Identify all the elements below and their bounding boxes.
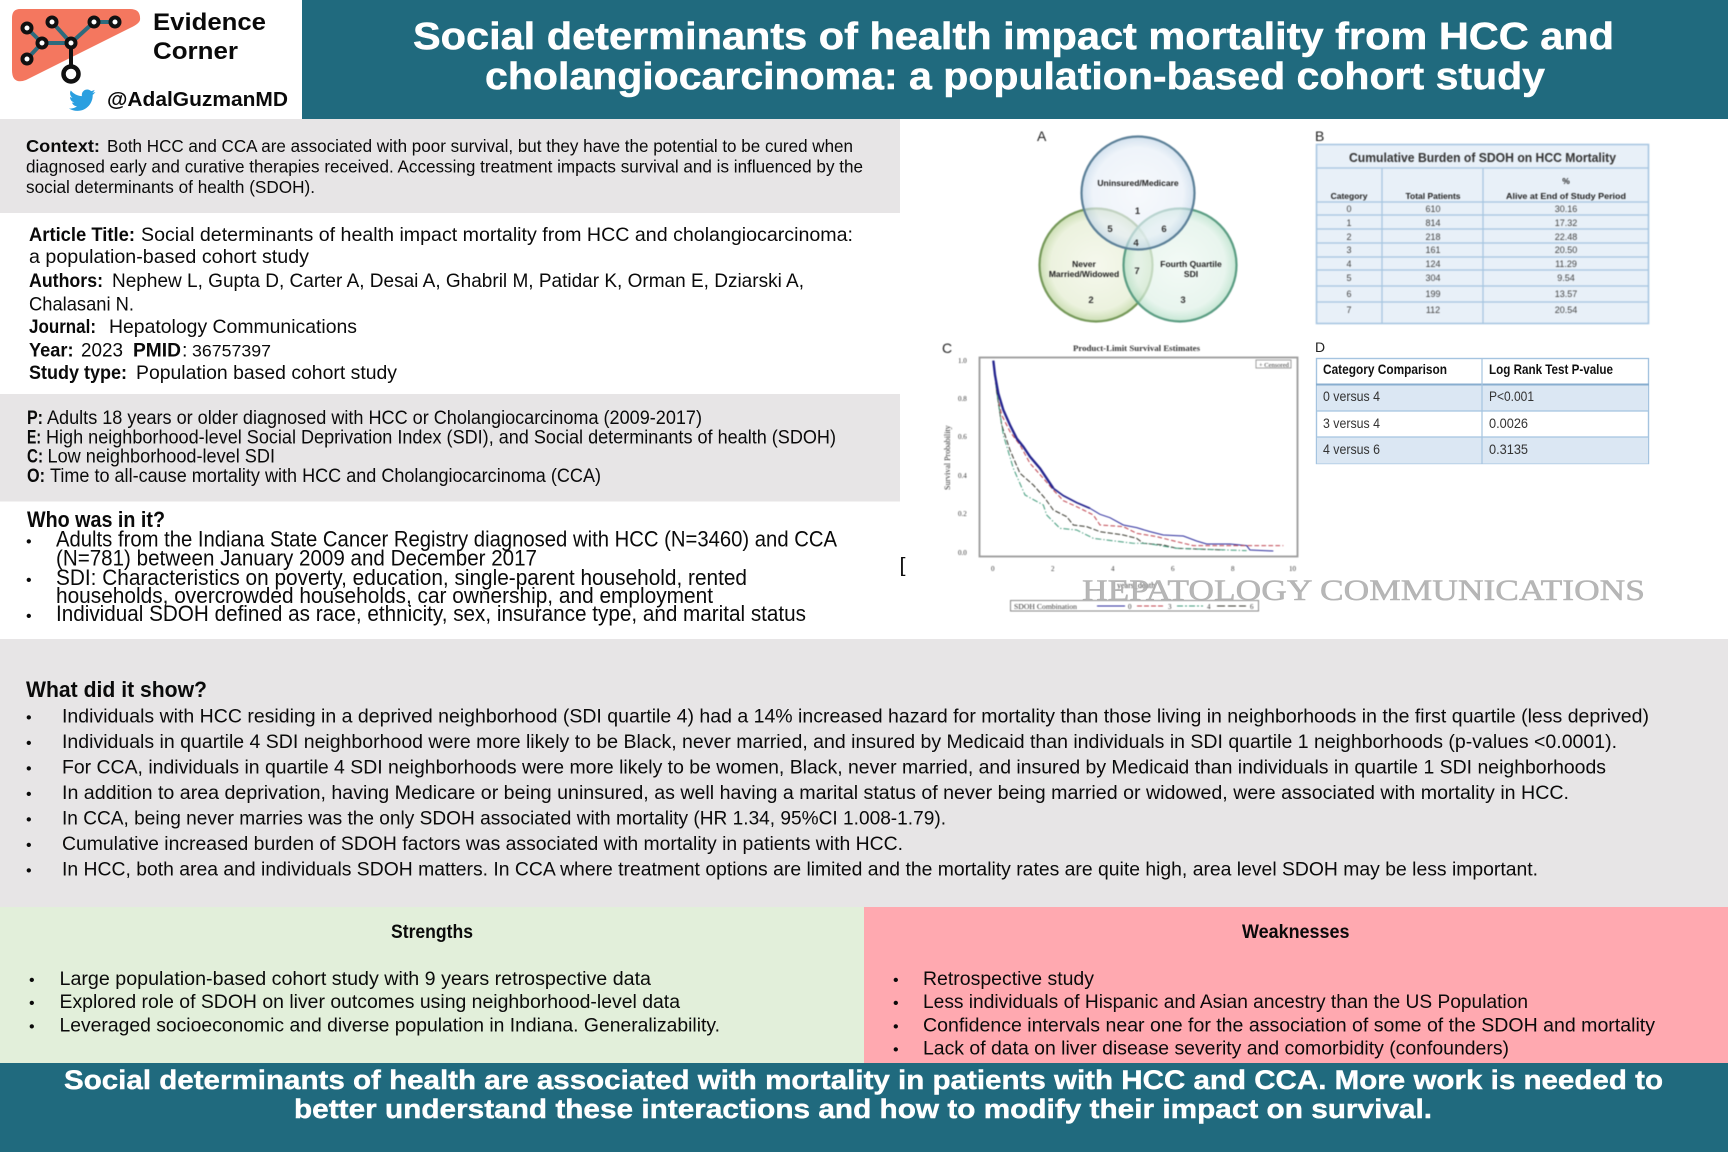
heading: What did it show? xyxy=(26,677,207,702)
logo: Evidence Corner xyxy=(12,9,288,111)
panel: article details: Study type: xyxy=(29,362,127,384)
censored key xyxy=(1256,360,1291,369)
icon: liver with network xyxy=(12,9,140,82)
findings list: For CCA, individuals in quartile 4 SDI neighborhoods were more likely to be women, Black, never married, and insured by Medicaid than individuals in quartile 1 SDI neighborhoods xyxy=(62,758,1606,778)
strengths list: Explored role of SDOH on liver outcomes using neighborhood-level data xyxy=(60,992,680,1013)
panel: article details: Chalasani N. xyxy=(29,294,134,316)
twitter handle: @AdalGuzmanMD xyxy=(107,88,288,111)
panel: article details xyxy=(29,224,853,384)
bullet list: • xyxy=(26,572,32,589)
figure B: cumulative burden table: 4 xyxy=(1346,259,1352,269)
footer: conclusion: Social determinants of health are associated with mortality in patients with HCC and CCA. More work is needed to xyxy=(64,1065,1663,1095)
title xyxy=(413,16,1614,98)
figure B: cumulative burden table: 11.29 xyxy=(1555,259,1577,269)
stray bracket: [ xyxy=(900,555,906,577)
figure B: cumulative burden table: 30.16 xyxy=(1555,204,1577,214)
weaknesses list: • xyxy=(893,972,899,989)
figure C: survival curves: Product-Limit Survival Estimates xyxy=(1073,343,1201,353)
panel: article details: 2023 xyxy=(81,340,123,362)
panel: what did it show xyxy=(0,639,1728,907)
panel: weaknesses xyxy=(864,907,1728,1063)
findings list: Cumulative increased burden of SDOH factors was associated with mortality in patients with HCC. xyxy=(62,834,903,855)
panel: article details: Authors: xyxy=(29,270,103,292)
figure B: cumulative burden table: 7 xyxy=(1346,305,1352,315)
figure B: cumulative burden table: 13.57 xyxy=(1555,289,1577,299)
legend: 4 xyxy=(1207,603,1211,611)
figure B: cumulative burden table: 6 xyxy=(1346,289,1352,299)
bullet list: • xyxy=(26,608,32,625)
panel: article details: PMID xyxy=(133,340,181,362)
panel: PECO: Adults 18 years or older diagnosed with HCC or Cholangiocarcinoma (2009-2017) xyxy=(47,408,702,429)
heading: Strengths xyxy=(391,922,473,943)
findings list: Individuals in quartile 4 SDI neighborhood were more likely to be Black, never married, and insured by Medicaid than individuals in SDI quartile 1 neighborhoods (p-values <0.0001). xyxy=(62,732,1617,753)
weaknesses list: Confidence intervals near one for the association of some of the SDOH and mortality xyxy=(923,1016,1655,1036)
panel: context: social determinants of health (SDOH). xyxy=(26,177,315,197)
figure C: survival curves: 0.2 xyxy=(958,510,967,518)
figure C: survival curves: 4 xyxy=(1111,565,1115,573)
figure A: Venn diagram: 4 xyxy=(1133,238,1139,249)
figure B: cumulative burden table: Category xyxy=(1331,191,1368,201)
panel: context xyxy=(0,119,900,213)
figure C: survival curves: C xyxy=(942,340,952,356)
figure C: survival curves: 0 xyxy=(991,565,995,573)
figure C: survival curves: 0.0 xyxy=(958,549,967,557)
figure B: cumulative burden table: 218 xyxy=(1425,232,1441,242)
panel: PECO: P: xyxy=(27,408,43,429)
figure B: cumulative burden table: % xyxy=(1562,176,1570,186)
figure B: cumulative burden table: 9.54 xyxy=(1557,273,1575,283)
footer: conclusion: better understand these interactions and how to modify their impact on survival. xyxy=(294,1094,1432,1124)
figure C: survival curves: Survival Probability xyxy=(943,425,952,490)
strengths list xyxy=(29,969,720,1036)
panel: context: Both HCC and CCA are associated with poor survival, but they have the potential to be cured when xyxy=(107,136,853,156)
figure D: log rank table: Category Comparison xyxy=(1323,361,1447,377)
figure B: cumulative burden table: 610 xyxy=(1425,204,1441,214)
figure A: Venn diagram: 6 xyxy=(1161,224,1167,235)
panel: PECO: E: xyxy=(27,428,41,448)
legend: 3 xyxy=(1168,603,1172,611)
figure C: survival curves: 6 xyxy=(1171,565,1175,573)
figure D: log rank table: P<0.001 xyxy=(1489,388,1534,404)
findings list: • xyxy=(26,710,32,726)
panel: article details: Hepatology Communications xyxy=(109,316,357,338)
panel: who was in it xyxy=(26,507,837,626)
figure B: cumulative burden table: Alive at End of Study Period xyxy=(1506,191,1626,201)
figure D: log rank table xyxy=(1315,339,1649,464)
figure A: Venn diagram: Never xyxy=(1072,259,1096,269)
figure B: cumulative burden table: 124 xyxy=(1425,259,1441,269)
figure B: cumulative burden table: B xyxy=(1315,128,1324,144)
figure A: Venn diagram: 3 xyxy=(1180,295,1186,306)
panel: article details: Article Title: xyxy=(29,224,135,246)
figure B: cumulative burden table: 20.50 xyxy=(1555,245,1577,255)
panel: article details: a population-based cohort study xyxy=(29,246,309,268)
figure C: survival curves: 10 xyxy=(1289,565,1296,573)
censored key: + Censored xyxy=(1259,362,1290,369)
figure A: Venn diagram: Fourth Quartile xyxy=(1160,259,1222,269)
bullet list xyxy=(26,526,837,626)
bullet list: SDI: Characteristics on poverty, education, single-parent household, rented xyxy=(56,565,747,590)
figure C: survival curves xyxy=(942,340,1298,611)
figure B: cumulative burden table: 1 xyxy=(1346,218,1352,228)
figure B: cumulative burden table: Total Patients xyxy=(1405,191,1461,201)
panel: article details: Year: xyxy=(29,340,74,362)
figure D: log rank table: D xyxy=(1315,339,1325,355)
figure C: survival curves: 0.8 xyxy=(958,395,967,403)
weaknesses list: Lack of data on liver disease severity and comorbidity (confounders) xyxy=(923,1038,1509,1060)
figure D: log rank table: 4 versus 6 xyxy=(1323,441,1380,457)
panel: PECO: Low neighborhood-level SDI xyxy=(48,446,275,468)
figure B: cumulative burden table xyxy=(1315,128,1649,324)
figure A: Venn diagram: 7 xyxy=(1134,266,1140,277)
figure A: Venn diagram: 5 xyxy=(1107,224,1113,235)
bullet list: Adults from the Indiana State Cancer Registry diagnosed with HCC (N=3460) and CCA xyxy=(56,526,837,552)
brand name xyxy=(153,9,266,65)
findings list: In addition to area deprivation, having Medicare or being uninsured, as well having a marital status of never being married or widowed, were associated with mortality in HCC. xyxy=(62,783,1569,804)
figure B: cumulative burden table: 2 xyxy=(1346,232,1352,242)
findings list: In CCA, being never marries was the only SDOH associated with mortality (HR 1.34, 95%CI 1.008-1.79). xyxy=(62,808,946,830)
panel: article details: : xyxy=(182,340,187,362)
strengths list: • xyxy=(29,972,35,989)
panel: article details: Population based cohort study xyxy=(136,362,397,384)
figure B: cumulative burden table: 20.54 xyxy=(1555,305,1577,315)
panel: article details: Nephew L, Gupta D, Carter A, Desai A, Ghabril M, Patidar K, Orman E, Dziarski A, xyxy=(112,270,804,292)
figure A: Venn diagram: 1 xyxy=(1135,206,1141,217)
strengths list: Large population-based cohort study with 9 years retrospective data xyxy=(60,969,651,990)
bullet list: (N=781) between January 2009 and December 2017 xyxy=(56,546,537,570)
findings list: • xyxy=(26,812,32,828)
figure B: cumulative burden table: 5 xyxy=(1346,273,1352,283)
brand name: Corner xyxy=(153,38,238,65)
panel: strengths xyxy=(0,907,864,1063)
figure B: cumulative burden table: 0 xyxy=(1346,204,1352,214)
legend: 0 xyxy=(1128,603,1132,611)
findings list: • xyxy=(26,786,32,803)
findings list: • xyxy=(26,862,32,880)
figure C: survival curves: 0.4 xyxy=(958,472,967,480)
title: Social determinants of health impact mortality from HCC and xyxy=(413,16,1614,58)
figure B: cumulative burden table: Cumulative Burden of SDOH on HCC Mortality xyxy=(1349,150,1617,165)
figure C: survival curves: years_death xyxy=(1117,581,1155,590)
legend: SDOH Combination xyxy=(1014,602,1077,611)
panel: PECO: Time to all-cause mortality with HCC and Cholangiocarcinoma (CCA) xyxy=(50,466,601,487)
figure C: survival curves: 2 xyxy=(1051,565,1055,573)
panel: article details: Journal: xyxy=(29,316,96,338)
figure B: cumulative burden table: 199 xyxy=(1425,289,1441,299)
strengths list: Leveraged socioeconomic and diverse population in Indiana. Generalizability. xyxy=(60,1016,720,1036)
figure C: survival curves: 1.0 xyxy=(958,357,967,365)
figure A: Venn diagram: SDI xyxy=(1184,269,1198,279)
panel: context: Context: xyxy=(26,136,100,156)
footer: conclusion xyxy=(0,1063,1728,1152)
panel: PECO xyxy=(0,394,900,502)
figure B: cumulative burden table: 304 xyxy=(1425,273,1441,283)
panel: PECO: O: xyxy=(27,466,45,487)
heading: Who was in it? xyxy=(27,507,165,532)
figure D: log rank table: 3 versus 4 xyxy=(1323,415,1380,431)
findings list: • xyxy=(26,735,32,752)
figure D: log rank table: 0 versus 4 xyxy=(1323,388,1380,404)
findings list xyxy=(26,706,1649,880)
weaknesses list: Retrospective study xyxy=(923,969,1095,990)
weaknesses list: Less individuals of Hispanic and Asian ancestry than the US Population xyxy=(923,992,1528,1013)
figure A: Venn diagram: 2 xyxy=(1088,295,1094,306)
bullet list: Individual SDOH defined as race, ethnicity, sex, insurance type, and marital status xyxy=(56,601,806,626)
findings list: Individuals with HCC residing in a deprived neighborhood (SDI quartile 4) had a 14% increased hazard for mortality than those living in neighborhoods in the first quartile (less deprived) xyxy=(62,706,1649,728)
figure A: Venn diagram: Uninsured/Medicare xyxy=(1097,178,1179,188)
findings list: • xyxy=(26,760,32,778)
panel: PECO: C: xyxy=(27,446,43,468)
figure A: Venn diagram: A xyxy=(1037,128,1047,144)
brand name: Evidence xyxy=(153,9,266,36)
legend: 6 xyxy=(1250,603,1254,611)
weaknesses list: • xyxy=(893,995,899,1012)
panel: article details: 36757397 xyxy=(192,342,271,360)
figure C: survival curves: 8 xyxy=(1231,565,1235,573)
icon: twitter bird xyxy=(69,89,95,111)
panel: context: diagnosed early and curative therapies received. Accessing treatment impacts survival and is influenced by the xyxy=(26,156,863,176)
figure D: log rank table: 0.0026 xyxy=(1489,415,1528,431)
figure D: log rank table: 0.3135 xyxy=(1489,441,1528,457)
watermark: journal name: HEPATOLOGY COMMUNICATIONS xyxy=(1082,574,1645,607)
figure C: survival curves: 0.6 xyxy=(958,433,967,441)
panel: PECO: High neighborhood-level Social Deprivation Index (SDI), and Social determinants of health (SDOH) xyxy=(46,428,836,448)
weaknesses list xyxy=(893,969,1655,1060)
findings list: • xyxy=(26,837,32,854)
weaknesses list: • xyxy=(893,1042,899,1058)
figure A: Venn diagram xyxy=(1037,128,1236,322)
strengths list: • xyxy=(29,995,35,1012)
bullet list: • xyxy=(26,534,32,550)
figure D: log rank table: Log Rank Test P-value xyxy=(1489,361,1613,377)
figure B: cumulative burden table: 112 xyxy=(1426,305,1440,315)
figure B: cumulative burden table: 22.48 xyxy=(1555,232,1577,242)
bullet list: households, overcrowded households, car ownership, and employment xyxy=(56,583,713,608)
panel: article details: Social determinants of health impact mortality from HCC and cholangiocarcinoma: xyxy=(141,224,853,246)
figure A: Venn diagram: Married/Widowed xyxy=(1049,269,1119,279)
figure B: cumulative burden table: 161 xyxy=(1425,245,1441,255)
figure B: cumulative burden table: 3 xyxy=(1346,245,1352,255)
figure B: cumulative burden table: 17.32 xyxy=(1555,218,1577,228)
title: cholangiocarcinoma: a population-based cohort study xyxy=(485,56,1545,98)
strengths list: • xyxy=(29,1018,35,1036)
title banner xyxy=(302,0,1728,119)
legend xyxy=(1010,600,1258,611)
weaknesses list: • xyxy=(893,1018,899,1036)
findings list: In HCC, both area and individuals SDOH matters. In CCA where treatment options are limited and the mortality rates are quite high, area level SDOH may be less important. xyxy=(62,860,1538,880)
heading: Weaknesses xyxy=(1242,922,1350,943)
figure B: cumulative burden table: 814 xyxy=(1425,218,1441,228)
